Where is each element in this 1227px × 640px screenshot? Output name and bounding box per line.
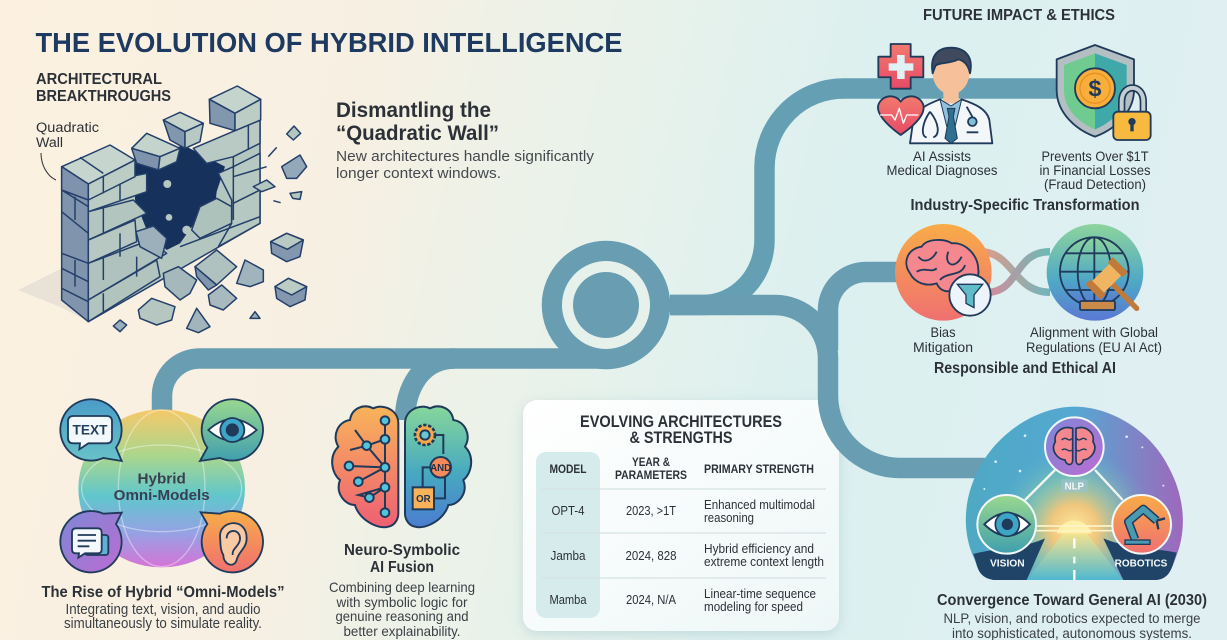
table: evolving architectures and strengths: Mamba bbox=[550, 593, 587, 607]
title: THE EVOLUTION OF HYBRID INTELLIGENCE bbox=[36, 27, 622, 58]
icon: vision node: VISION bbox=[990, 559, 1025, 570]
table: evolving architectures and strengths: modeling for speed bbox=[704, 600, 803, 614]
text block: neuro-symbolic fusion: with symbolic logic for bbox=[336, 594, 468, 610]
timeline pipes and central ring bbox=[162, 88, 1060, 468]
icon: chat bubble bbox=[60, 511, 122, 572]
text block: medical diagnoses: AI Assists bbox=[913, 148, 971, 164]
text block: rise of hybrid omni-models: The Rise of Hybrid “Omni-Models” bbox=[42, 584, 284, 601]
icon: doctor with medical cross and heart bbox=[878, 44, 992, 143]
table: evolving architectures and strengths: PARAMETERS bbox=[615, 468, 687, 482]
text block: dismantling the quadratic wall: Dismantling the bbox=[336, 99, 491, 122]
panel: architectures table card bbox=[523, 400, 839, 631]
text block: convergence toward general AI: NLP, vision, and robotics expected to merge bbox=[944, 610, 1201, 626]
icon: shield with dollar coin and padlock: $ bbox=[1089, 76, 1102, 102]
text block: convergence toward general AI bbox=[937, 592, 1207, 640]
heading: future impact and ethics: FUTURE IMPACT & ETHICS bbox=[923, 7, 1115, 24]
text block: regulation alignment: Regulations (EU AI Act) bbox=[1026, 339, 1162, 355]
icon: neuro-symbolic brain bbox=[332, 406, 471, 527]
hole fragments bbox=[163, 180, 191, 234]
wall bricks right of the hole bbox=[180, 153, 267, 247]
icon: robotics node: ROBOTICS bbox=[1115, 559, 1168, 570]
icon: audio bubble bbox=[201, 511, 263, 572]
panel: hybrid omni-models diagram: Hybrid bbox=[137, 470, 186, 487]
text block: neuro-symbolic fusion bbox=[329, 542, 475, 639]
heading: architectural breakthroughs bbox=[36, 71, 171, 105]
table: evolving architectures and strengths: Enhanced multimodal bbox=[704, 498, 815, 512]
text block: neuro-symbolic fusion: Neuro-Symbolic bbox=[344, 542, 460, 559]
text block: neuro-symbolic fusion: genuine reasoning and bbox=[336, 608, 468, 624]
icon: shield with dollar coin and padlock bbox=[1057, 45, 1151, 140]
icon: bias mitigation and global regulation linked circles bbox=[895, 224, 1143, 321]
text block: rise of hybrid omni-models: simultaneously to simulate reality. bbox=[64, 616, 262, 632]
table: evolving architectures and strengths: Jamba bbox=[550, 549, 586, 563]
table: evolving architectures and strengths: 2024, 828 bbox=[626, 549, 677, 563]
icon: NLP brain node: NLP bbox=[1065, 481, 1085, 492]
text block: fraud detection bbox=[1040, 148, 1150, 192]
icon: NLP brain node bbox=[1045, 417, 1104, 492]
table: evolving architectures and strengths: 2023, >1T bbox=[626, 504, 676, 518]
text block: fraud detection: (Fraud Detection) bbox=[1044, 176, 1146, 192]
text block: regulation alignment bbox=[1026, 324, 1162, 355]
text block: fraud detection: in Financial Losses bbox=[1040, 162, 1150, 178]
icon: text bubble: TEXT bbox=[73, 423, 108, 438]
table: evolving architectures and strengths bbox=[550, 413, 824, 614]
icon: vision bubble bbox=[200, 399, 263, 461]
table: evolving architectures and strengths: extreme context length bbox=[704, 555, 824, 569]
callout: quadratic wall label: Wall bbox=[36, 135, 63, 150]
panel: convergence dome bbox=[966, 407, 1183, 580]
table: evolving architectures and strengths: EVOLVING ARCHITECTURES bbox=[580, 413, 782, 431]
text block: regulation alignment: Alignment with Global bbox=[1030, 324, 1158, 340]
text block: medical diagnoses: Medical Diagnoses bbox=[886, 162, 998, 178]
table: evolving architectures and strengths: YEAR & bbox=[632, 455, 670, 469]
heading: industry-specific transformation: Industry-Specific Transformation bbox=[910, 197, 1140, 214]
callout: quadratic wall label: Quadratic bbox=[36, 120, 99, 135]
text block: neuro-symbolic fusion: better explainability. bbox=[344, 623, 460, 639]
text block: dismantling the quadratic wall bbox=[336, 99, 595, 182]
text block: neuro-symbolic fusion: Combining deep learning bbox=[329, 579, 475, 595]
icon: globe with gavel bbox=[1047, 224, 1143, 321]
text block: bias mitigation: Mitigation bbox=[913, 339, 973, 355]
table: evolving architectures and strengths: MODEL bbox=[550, 462, 586, 476]
text block: medical diagnoses bbox=[886, 148, 998, 178]
icon: brain with funnel bbox=[895, 224, 992, 321]
text block: neuro-symbolic fusion: AI Fusion bbox=[370, 559, 434, 576]
icon: robotics node bbox=[1112, 495, 1171, 570]
table: evolving architectures and strengths: Hybrid efficiency and bbox=[704, 542, 814, 556]
table: evolving architectures and strengths: Linear-time sequence bbox=[704, 587, 816, 601]
callout: quadratic wall label bbox=[36, 120, 99, 180]
table: evolving architectures and strengths: OPT-4 bbox=[552, 504, 585, 518]
text block: convergence toward general AI: Convergence Toward General AI (2030) bbox=[937, 592, 1207, 609]
text block: fraud detection: Prevents Over $1T bbox=[1042, 148, 1149, 164]
table: evolving architectures and strengths: PRIMARY STRENGTH bbox=[704, 462, 814, 476]
wall bricks left of the hole bbox=[62, 173, 167, 322]
text block: rise of hybrid omni-models: Integrating text, vision, and audio bbox=[66, 602, 260, 618]
icon: vision node bbox=[977, 495, 1036, 570]
logic flow: OR bbox=[416, 494, 431, 505]
icon: text bubble bbox=[60, 399, 122, 461]
table: evolving architectures and strengths: reasoning bbox=[704, 511, 754, 525]
fallen blocks and rubble bbox=[113, 126, 307, 333]
panel: hybrid omni-models diagram bbox=[60, 399, 263, 572]
panel: hybrid omni-models diagram: Omni-Models bbox=[114, 487, 210, 504]
icon: crumbling brick wall bbox=[18, 86, 307, 333]
text block: dismantling the quadratic wall: longer context windows. bbox=[336, 165, 501, 182]
table: evolving architectures and strengths: 2024, N/A bbox=[626, 593, 677, 607]
logic flow: AND bbox=[430, 463, 451, 474]
text block: bias mitigation bbox=[913, 324, 973, 355]
logic flow bbox=[413, 425, 451, 509]
heading: architectural breakthroughs: ARCHITECTURAL bbox=[36, 71, 162, 88]
neural network nodes bbox=[345, 416, 389, 517]
text block: dismantling the quadratic wall: New architectures handle significantly bbox=[336, 148, 595, 165]
heading: architectural breakthroughs: BREAKTHROUGHS bbox=[36, 88, 171, 105]
table: evolving architectures and strengths: & STRENGTHS bbox=[630, 429, 732, 447]
top left slab bbox=[62, 145, 135, 200]
heading: responsible and ethical AI: Responsible and Ethical AI bbox=[934, 360, 1116, 377]
text block: rise of hybrid omni-models bbox=[42, 584, 284, 632]
text block: dismantling the quadratic wall: “Quadratic Wall” bbox=[336, 122, 499, 145]
top blocks bbox=[132, 86, 261, 170]
text block: bias mitigation: Bias bbox=[930, 324, 956, 340]
